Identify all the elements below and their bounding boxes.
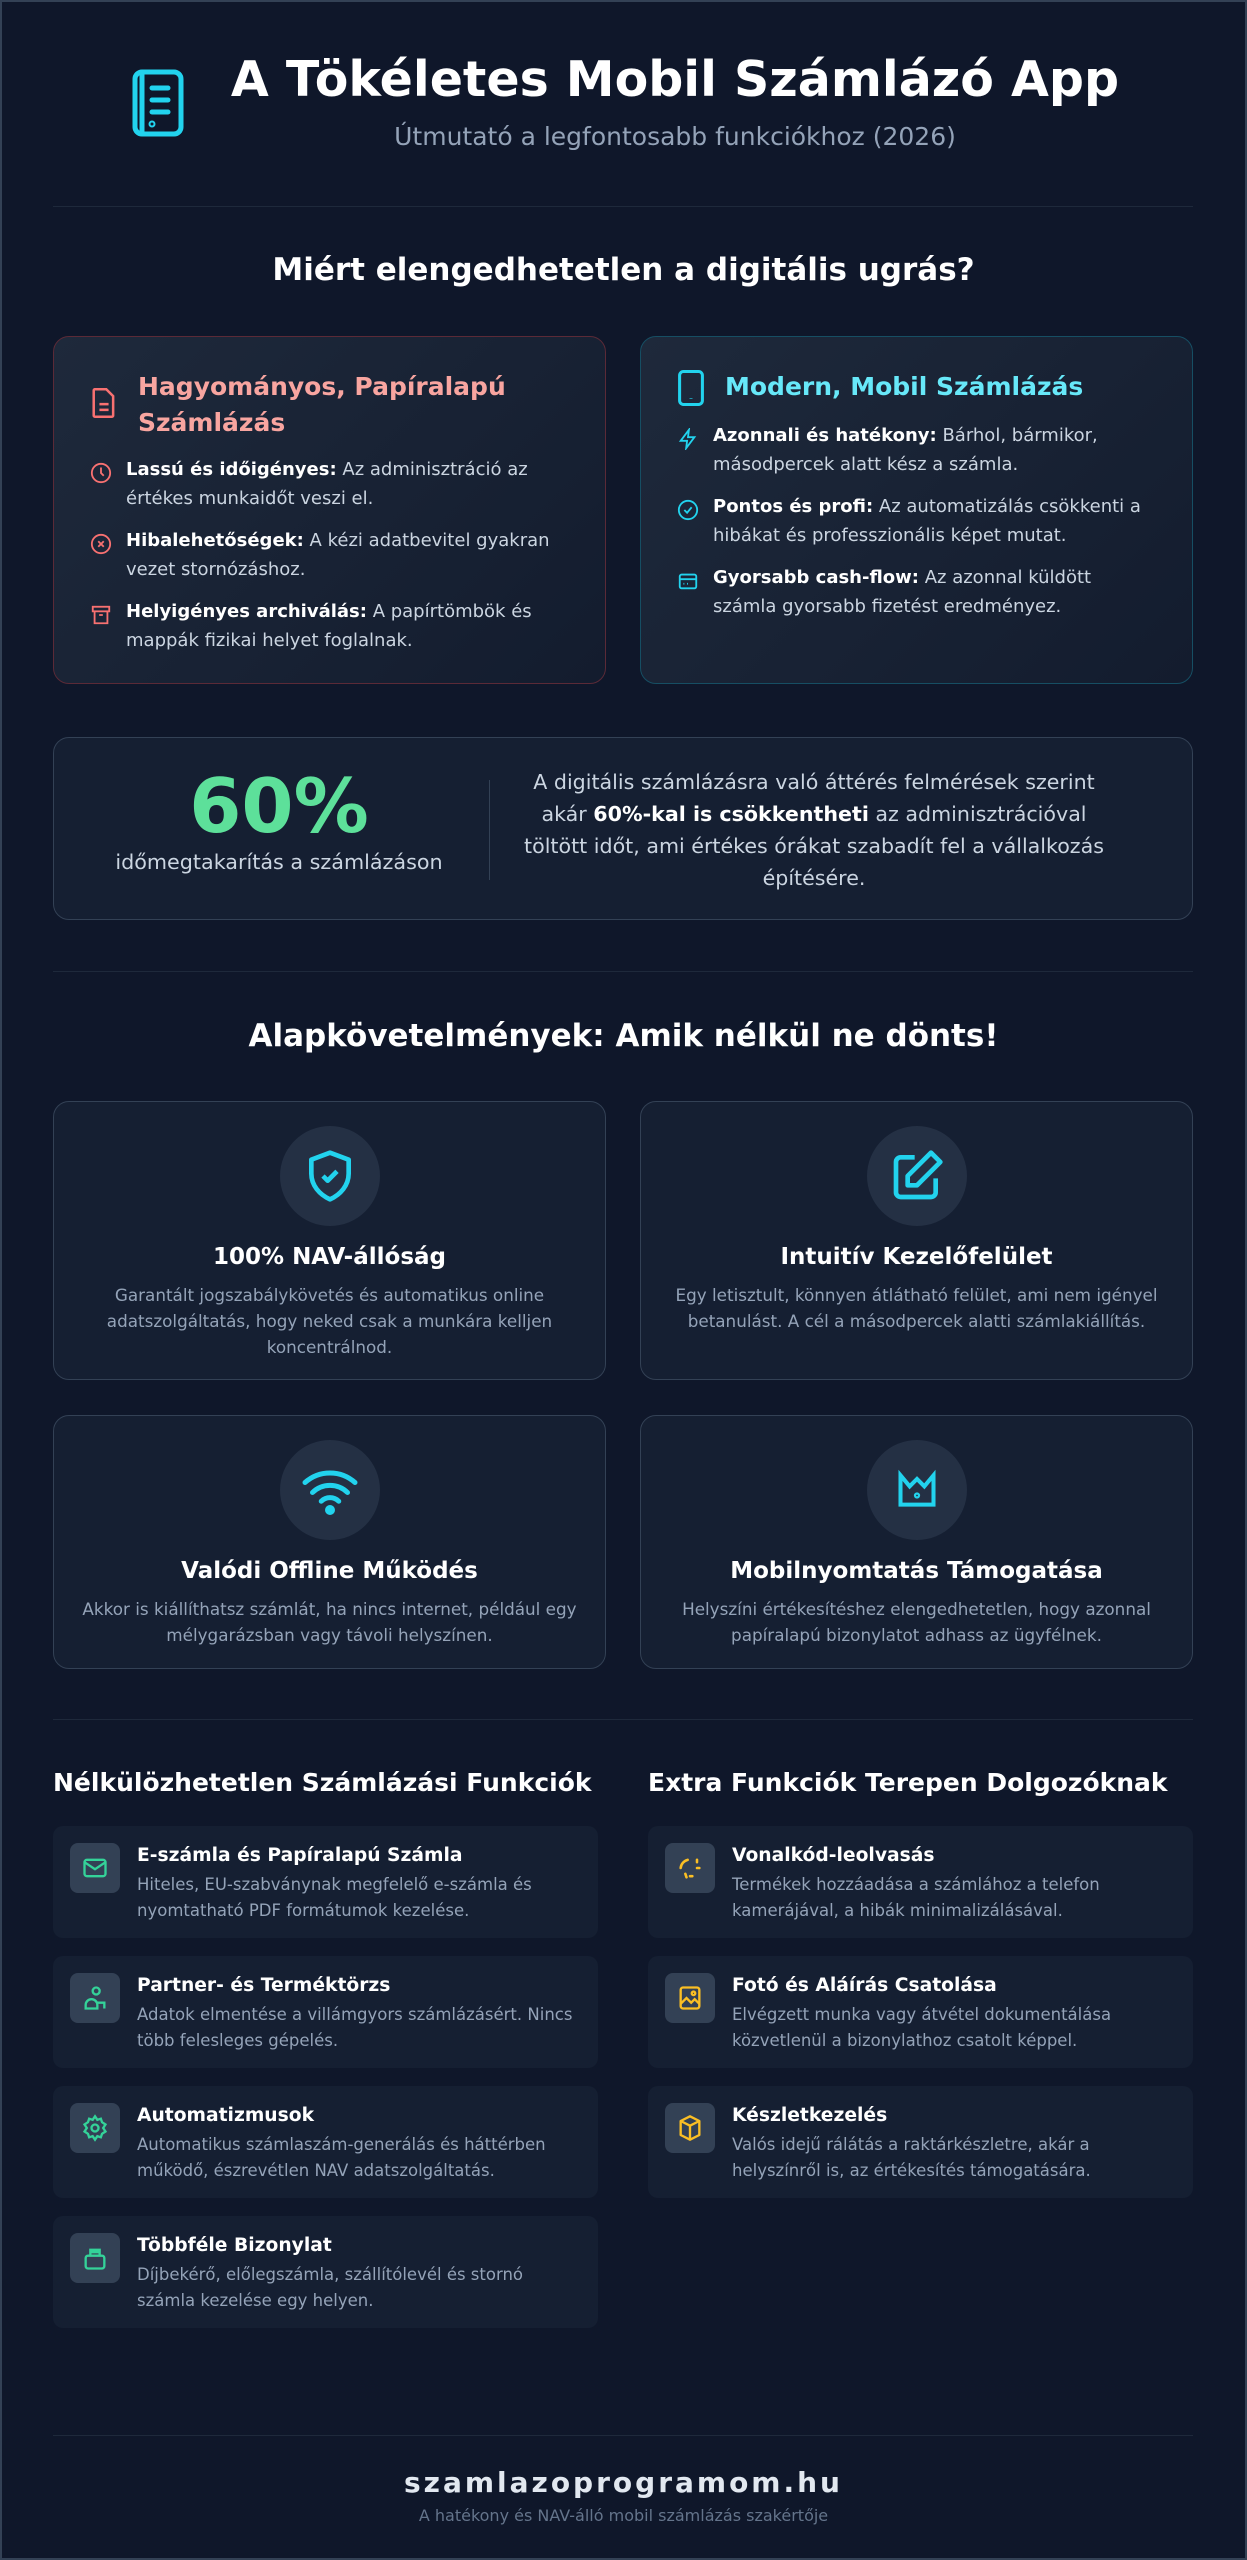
- panel: traditional: Helyigényes archiválás: A papírtömbök és mappák fizikai helyet foglalnak.: [126, 601, 532, 651]
- stat number: 60%: [189, 762, 369, 850]
- heading: extra functions: Extra Funkciók Terepen Dolgozóknak: [648, 1768, 1168, 1797]
- item: inventory: Valós idejű rálátás a raktárkészletre, akár a helyszínről is, az értékesítés támogatására.: [732, 2135, 1091, 2180]
- card: printing: Helyszíni értékesítéshez elengedhetetlen, hogy azonnal papíralapú bizonylatot adhass az ügyfélnek.: [682, 1599, 1151, 1645]
- item: e-invoice: Hiteles, EU-szabványnak megfelelő e-számla és nyomtatható PDF formátumok kezelése.: [137, 1875, 532, 1920]
- item: documents: Többféle Bizonylat: [137, 2235, 332, 2256]
- panel: traditional: [53, 336, 606, 684]
- item: documents: Díjbekérő, előlegszámla, szállítólevél és stornó számla kezelése egy helyen.: [137, 2265, 523, 2310]
- panel: modern: Gyorsabb cash-flow: Az azonnal küldött számla gyorsabb fizetést eredményez.: [713, 567, 1091, 617]
- panel: modern: [640, 336, 1193, 684]
- card: printing: [640, 1415, 1193, 1669]
- panel: modern: Modern, Mobil Számlázás: [725, 372, 1083, 401]
- heading: essential functions: Nélkülözhetetlen Számlázási Funkciók: [53, 1768, 592, 1797]
- footer brand: szamlazoprogramom.hu: [404, 2466, 843, 2499]
- card: UI: [640, 1101, 1193, 1380]
- title: A Tökéletes Mobil Számlázó App: [231, 51, 1119, 108]
- card: NAV: [53, 1101, 606, 1380]
- item: partners: Adatok elmentése a villámgyors számlázásért. Nincs több felesleges gépelés.: [137, 2005, 572, 2050]
- card: UI: Egy letisztult, könnyen átlátható felület, ami nem igényel betanulást. A cél a másodpercek alatti számlakiállítás.: [675, 1285, 1158, 1331]
- item: barcode: Termékek hozzáadása a számlához a telefon kamerájával, a hibák minimalizálásával.: [732, 1875, 1100, 1920]
- heading: why digital: Miért elengedhetetlen a digitális ugrás?: [272, 252, 975, 288]
- stat number: időmegtakarítás a számlázáson: [115, 850, 443, 874]
- card: NAV: 100% NAV-állóság: [213, 1244, 446, 1270]
- card: UI: Intuitív Kezelőfelület: [780, 1244, 1053, 1270]
- panel: traditional: Hagyományos, Papíralapú Számlázás: [138, 372, 506, 437]
- item: automation: [53, 2086, 598, 2198]
- item: automation: Automatikus számlaszám-generálás és háttérben működő, észrevétlen NAV adatszolgáltatás.: [137, 2135, 546, 2180]
- item: photo: Elvégzett munka vagy átvétel dokumentálása közvetlenül a bizonylathoz csatolt képpel.: [732, 2005, 1111, 2050]
- item: partners: Partner- és Terméktörzs: [137, 1975, 390, 1996]
- item: barcode: Vonalkód-leolvasás: [732, 1845, 934, 1866]
- footer tagline: A hatékony és NAV-álló mobil számlázás szakértője: [419, 2506, 828, 2525]
- item: inventory: [648, 2086, 1193, 2198]
- item: photo: [648, 1956, 1193, 2068]
- card: NAV: Garantált jogszabálykövetés és automatikus online adatszolgáltatás, hogy neked csak a munkára kelljen koncentrálnod.: [107, 1285, 552, 1357]
- card: offline: Valódi Offline Működés: [181, 1558, 478, 1584]
- item: partners: [53, 1956, 598, 2068]
- stat number: [115, 762, 443, 874]
- stat description: A digitális számlázásra való áttérés felmérések szerint akár 60%-kal is csökkentheti az adminisztrációval töltött időt, ami értékes órákat szabadít fel a vállalkozás építésére.: [524, 770, 1104, 890]
- panel: modern: Pontos és profi: Az automatizálás csökkenti a hibákat és professzionális képet mutat.: [713, 496, 1141, 546]
- subtitle: Útmutató a legfontosabb funkciókhoz (2026): [394, 122, 956, 151]
- item: photo: Fotó és Aláírás Csatolása: [732, 1975, 997, 1996]
- card: printing: Mobilnyomtatás Támogatása: [730, 1558, 1103, 1584]
- item: e-invoice: E-számla és Papíralapú Számla: [137, 1845, 462, 1866]
- card: offline: Akkor is kiállíthatsz számlát, ha nincs internet, például egy mélygarázsban vagy távoli helyszínen.: [82, 1599, 577, 1645]
- item: automation: Automatizmusok: [137, 2105, 314, 2126]
- panel: modern: Azonnali és hatékony: Bárhol, bármikor, másodpercek alatt kész a számla.: [713, 425, 1098, 475]
- item: inventory: Készletkezelés: [732, 2105, 887, 2126]
- panel: 60% stat: [53, 737, 1193, 920]
- item: e-invoice: [53, 1826, 598, 1938]
- heading: requirements: Alapkövetelmények: Amik nélkül ne dönts!: [249, 1018, 998, 1054]
- panel: traditional: Lassú és időigényes: Az adminisztráció az értékes munkaidőt veszi el.: [126, 459, 528, 509]
- item: documents: [53, 2216, 598, 2328]
- icon: app logo: [132, 70, 184, 136]
- panel: traditional: Hibalehetőségek: A kézi adatbevitel gyakran vezet stornózáshoz.: [126, 530, 550, 580]
- card: offline: [53, 1415, 606, 1669]
- item: barcode: [648, 1826, 1193, 1938]
